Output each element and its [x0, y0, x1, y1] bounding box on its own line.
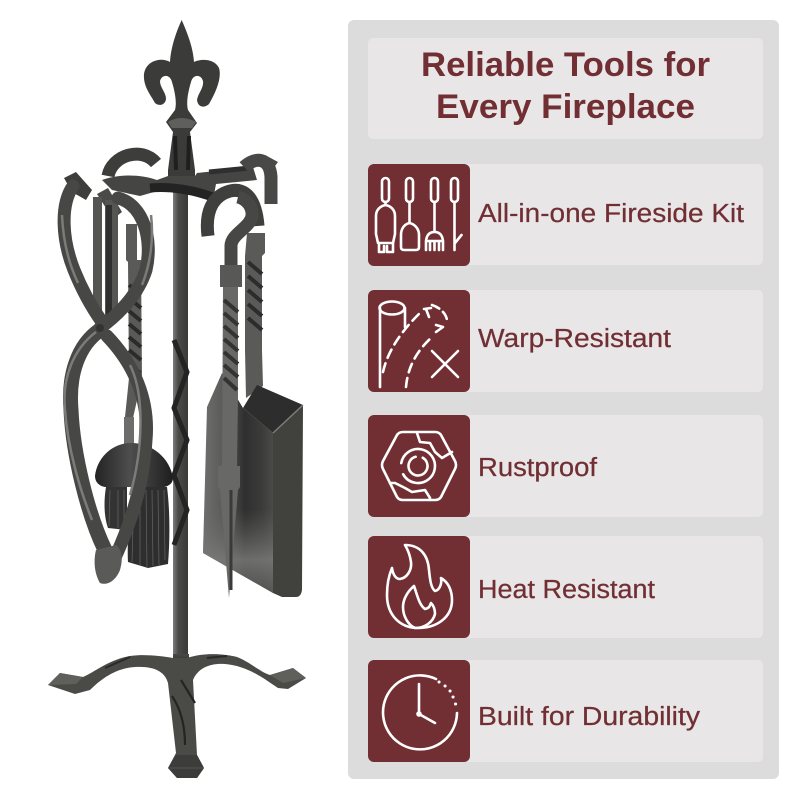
panel: warp-resistant	[368, 290, 763, 392]
panel: all-in-one fireside kit	[368, 164, 763, 266]
panel: features background	[348, 20, 779, 779]
title	[421, 46, 710, 126]
central finial	[144, 20, 220, 179]
icon: warp-resistant rod	[380, 302, 458, 387]
heading panel	[368, 38, 763, 139]
feature label: Built for Durability	[478, 703, 700, 731]
shovel	[203, 233, 303, 597]
icon: fireplace tools	[376, 178, 462, 252]
tongs	[62, 186, 152, 584]
feature label: Rustproof	[478, 454, 598, 482]
panel: built for durability	[368, 660, 763, 762]
icon: clock	[383, 675, 457, 749]
fireplace tool set product	[48, 20, 306, 778]
tripod base	[48, 654, 306, 778]
poker	[218, 197, 252, 598]
top rack with hooks	[64, 154, 278, 236]
icon: flame	[387, 545, 452, 628]
feature label: All-in-one Fireside Kit	[478, 200, 744, 228]
panel: heat resistant	[368, 536, 763, 638]
title: Every Fireplace	[436, 88, 695, 126]
icon: rust-free nut	[382, 432, 456, 500]
title: Reliable Tools for	[421, 46, 710, 84]
feature label: Warp-Resistant	[478, 325, 671, 353]
center rod and twisted shaft	[173, 192, 189, 688]
hearth brush	[95, 224, 173, 568]
panel: rustproof	[368, 415, 763, 517]
feature label: Heat Resistant	[478, 576, 655, 604]
